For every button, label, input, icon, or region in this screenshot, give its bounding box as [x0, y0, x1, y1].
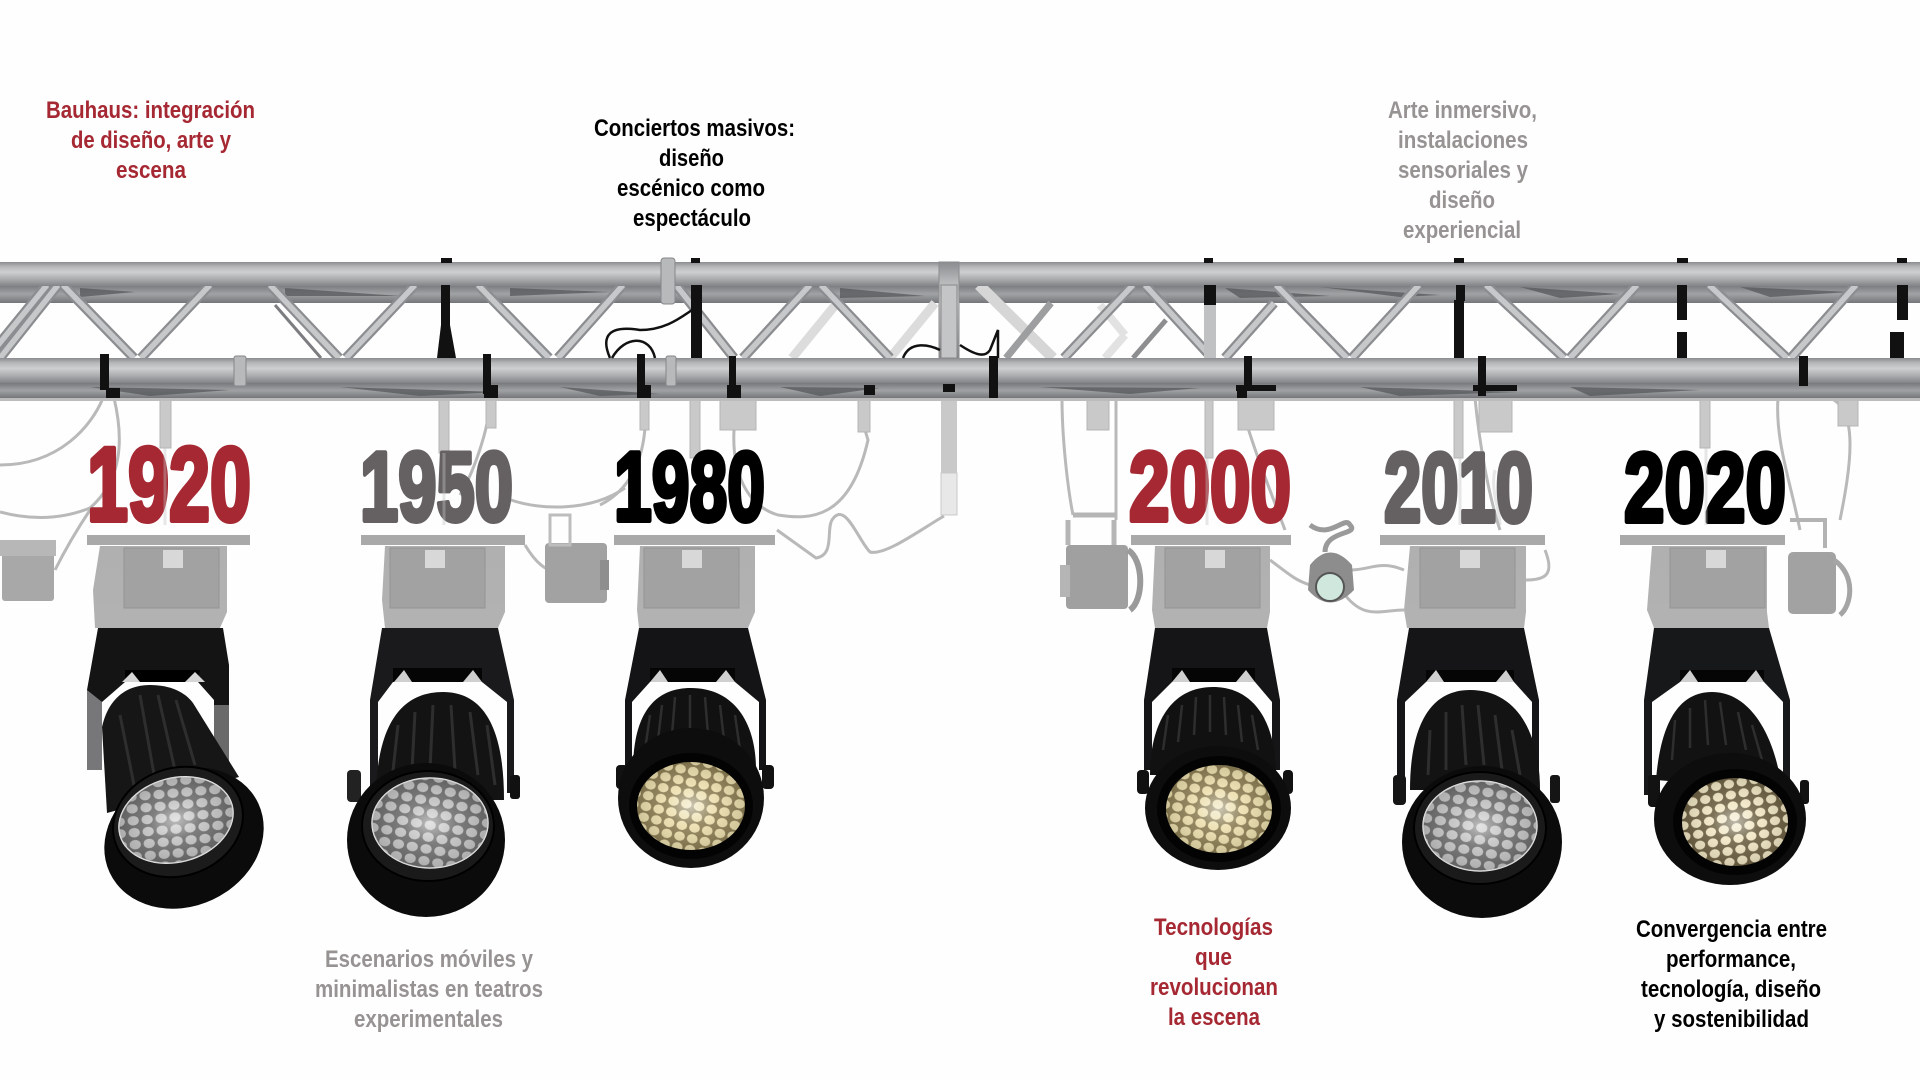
- caption 1950: Escenarios móviles y: [325, 946, 533, 973]
- year 1920: 1920: [87, 426, 251, 544]
- caption 2010: sensoriales y: [1398, 157, 1528, 184]
- spotlight 1920: [81, 535, 287, 934]
- faded hanging connectors: [160, 398, 1858, 458]
- caption 2010: [1388, 97, 1537, 244]
- year 1950: 1950: [360, 432, 513, 542]
- caption 1980: [594, 115, 795, 232]
- black wires behind lower tube: [606, 310, 998, 358]
- caption 2010: experiencial: [1403, 217, 1521, 244]
- faded work lamp 1950: [545, 515, 609, 603]
- caption 2000: [1150, 914, 1278, 1031]
- year 2000: 2000: [1129, 432, 1291, 542]
- faded vertical truss pin: [941, 398, 957, 515]
- caption 1920: [46, 97, 255, 184]
- year 1980: 1980: [614, 432, 765, 542]
- caption 1980: espectáculo: [633, 205, 751, 232]
- year 2010: 2010: [1384, 432, 1533, 542]
- caption 1920: de diseño, arte y: [71, 127, 231, 154]
- faded work lamp 2000: [1060, 515, 1140, 610]
- faded spot lamp with lit lens: [1308, 523, 1354, 602]
- caption 1920: Bauhaus: integración: [46, 97, 255, 124]
- caption 2020: y sostenibilidad: [1654, 1006, 1809, 1033]
- caption 2010: diseño: [1429, 187, 1495, 214]
- spotlight 2000: [1131, 535, 1293, 870]
- faint wires showing through year numerals: [165, 448, 1706, 525]
- caption 2020: Convergencia entre: [1636, 916, 1827, 943]
- spotlight 2010: [1380, 535, 1562, 918]
- spotlight 1980: [614, 535, 775, 868]
- caption 2000: que: [1195, 944, 1232, 971]
- caption 1950: [315, 946, 543, 1033]
- caption 2020: [1636, 916, 1827, 1033]
- lighting truss: [0, 258, 1920, 401]
- black cable ties on truss: [100, 258, 1908, 398]
- caption 2020: performance,: [1666, 946, 1796, 973]
- caption 2000: revolucionan: [1150, 974, 1278, 1001]
- spotlight 1950: [347, 535, 525, 917]
- year 2020: 2020: [1624, 432, 1786, 542]
- caption 1980: diseño: [659, 145, 724, 172]
- caption 2010: Arte inmersivo,: [1388, 97, 1537, 124]
- caption 1980: escénico como: [617, 175, 765, 202]
- caption 1920: escena: [116, 157, 186, 184]
- caption 2000: la escena: [1168, 1004, 1260, 1031]
- faded work lamp left: [0, 540, 56, 601]
- spotlight 2020: [1620, 535, 1809, 885]
- caption 2020: tecnología, diseño: [1641, 976, 1821, 1003]
- caption 2010: instalaciones: [1398, 127, 1528, 154]
- caption 1950: experimentales: [354, 1006, 503, 1033]
- caption 1980: Conciertos masivos:: [594, 115, 795, 142]
- caption 1950: minimalistas en teatros: [315, 976, 543, 1003]
- caption 2000: Tecnologías: [1154, 914, 1273, 941]
- faded work lamp 2020: [1788, 520, 1850, 615]
- faded cables and connectors: [0, 398, 1850, 612]
